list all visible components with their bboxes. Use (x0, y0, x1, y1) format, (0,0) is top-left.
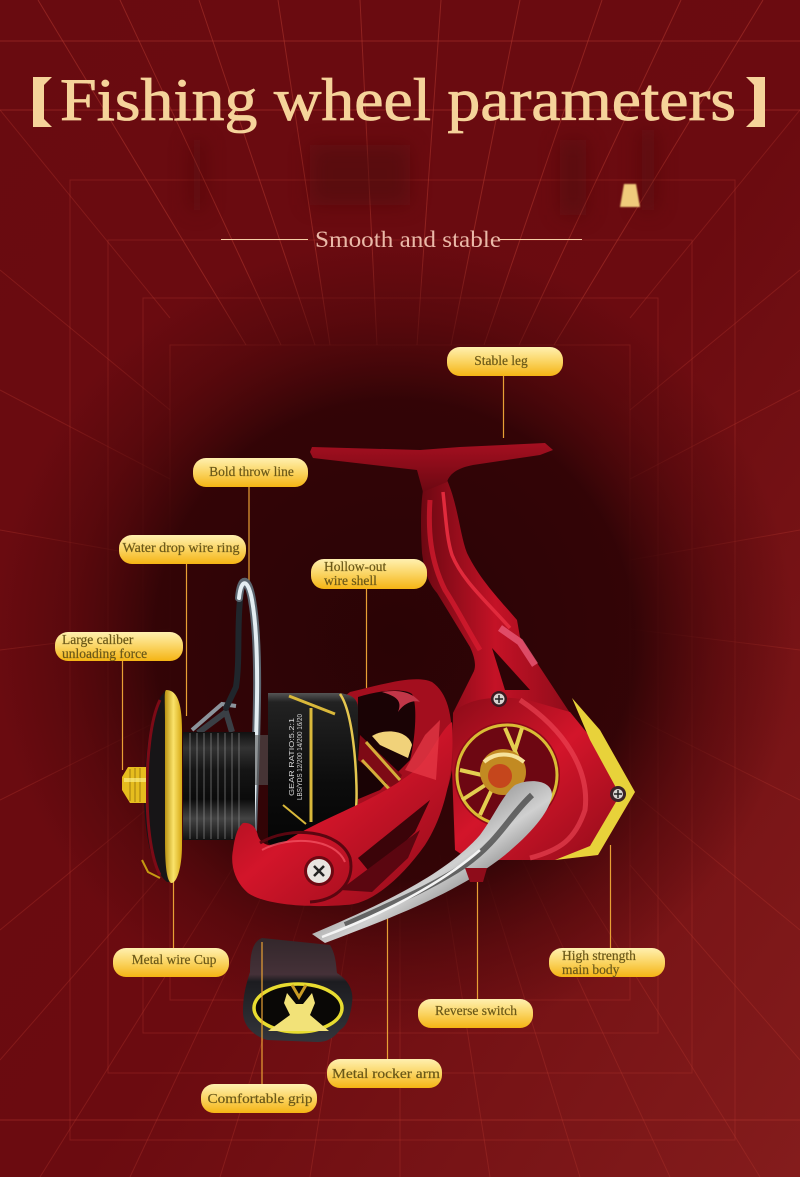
label: High strength main body (549, 948, 665, 977)
label: High strength main body: High strength (562, 948, 636, 963)
subtitle with rules: Smooth and stable (315, 227, 501, 252)
label: Comfortable grip (201, 1084, 317, 1113)
title: Fishing wheel parameters (60, 67, 736, 133)
label: Stable leg (447, 347, 563, 376)
line spool (183, 732, 269, 840)
spool skirt (268, 693, 358, 845)
label: Water drop wire ring (119, 535, 246, 564)
label: Water drop wire ring: Water drop wire ring (122, 540, 240, 555)
dark centre glow (0, 230, 800, 1050)
label: Hollow-out wire shell (311, 559, 427, 589)
gold gear window (454, 722, 560, 828)
label: Stable leg: Stable leg (474, 353, 528, 368)
label: Metal wire Cup: Metal wire Cup (132, 952, 217, 967)
spool skirt: LBS/YDS 12/200 14/200 16/20 (295, 714, 304, 800)
rotor opening (356, 690, 415, 800)
drag knob (122, 767, 146, 803)
handle grip (243, 938, 352, 1042)
label: Metal rocker arm: Metal rocker arm (332, 1066, 441, 1081)
label: Large caliber unloading force: unloading force (62, 646, 147, 661)
label: Hollow-out wire shell: Hollow-out (324, 559, 386, 574)
label: Reverse switch: Reverse switch (435, 1003, 517, 1018)
blurred smudges under title (190, 130, 656, 215)
label: High strength main body: main body (562, 962, 620, 977)
label: Bold throw line: Bold throw line (209, 464, 294, 479)
label: Reverse switch (418, 999, 533, 1028)
label: Large caliber unloading force (55, 632, 183, 661)
icon: rotor screw (304, 856, 334, 886)
grip leader line (261, 942, 263, 1084)
bail wire (226, 582, 257, 830)
fishing reel (122, 443, 635, 1042)
gold interior (372, 731, 412, 758)
bail arm bracket (192, 704, 236, 733)
front spool cup (142, 690, 182, 883)
icon: gold fragment (620, 184, 640, 207)
label: Metal wire Cup (113, 948, 229, 977)
rotor front cup (232, 720, 453, 906)
label: Bold throw line (193, 458, 308, 487)
label: Metal rocker arm (327, 1059, 442, 1088)
switch tab (465, 868, 487, 882)
gear housing body (452, 691, 635, 860)
rotor shell back (340, 679, 452, 880)
T foot and stem (310, 443, 570, 713)
spool skirt: GEAR RATIO:5.2:1 (287, 718, 296, 796)
leader lines (122, 376, 610, 1059)
metal rocker arm (312, 781, 552, 943)
label: Comfortable grip: Comfortable grip (208, 1091, 313, 1106)
label: Hollow-out wire shell: wire shell (324, 573, 377, 588)
label: Large caliber unloading force: Large caliber (62, 632, 134, 647)
